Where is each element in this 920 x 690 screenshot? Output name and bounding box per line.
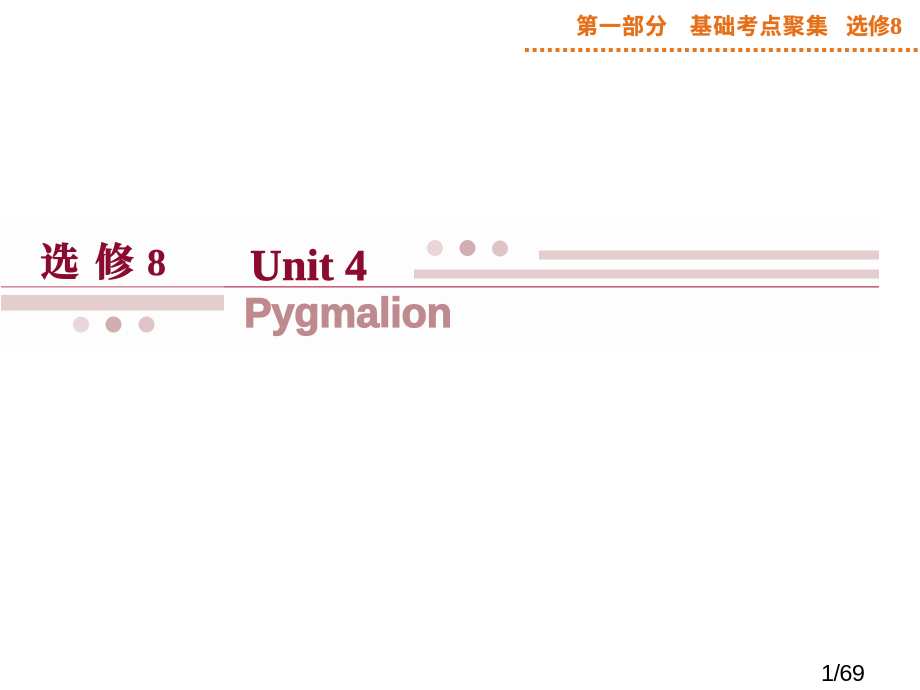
decorative upper bars	[414, 250, 879, 278]
unit heading: Unit 4	[250, 241, 367, 290]
left bar	[1, 295, 224, 310]
subtitle: Pygmalion: Pygmalion	[244, 289, 452, 336]
title banner	[0, 222, 879, 352]
upper dots	[427, 240, 508, 256]
left title: 选修8	[40, 232, 166, 288]
left title: 选修8: 8	[147, 242, 166, 284]
left title: 选修8: 修	[95, 232, 134, 288]
page number: 1/69	[821, 660, 865, 686]
left title: 选修8: 选	[40, 232, 79, 288]
header: section breadcrumb: 基础考点聚集	[690, 9, 828, 41]
header: section breadcrumb	[576, 9, 902, 41]
header: section breadcrumb: 选修8	[846, 9, 902, 41]
lower dots	[73, 316, 154, 332]
banner rule	[1, 286, 879, 288]
banner background	[0, 222, 879, 352]
header: section breadcrumb: 第一部分	[576, 9, 667, 41]
header dotted rule	[525, 48, 920, 52]
